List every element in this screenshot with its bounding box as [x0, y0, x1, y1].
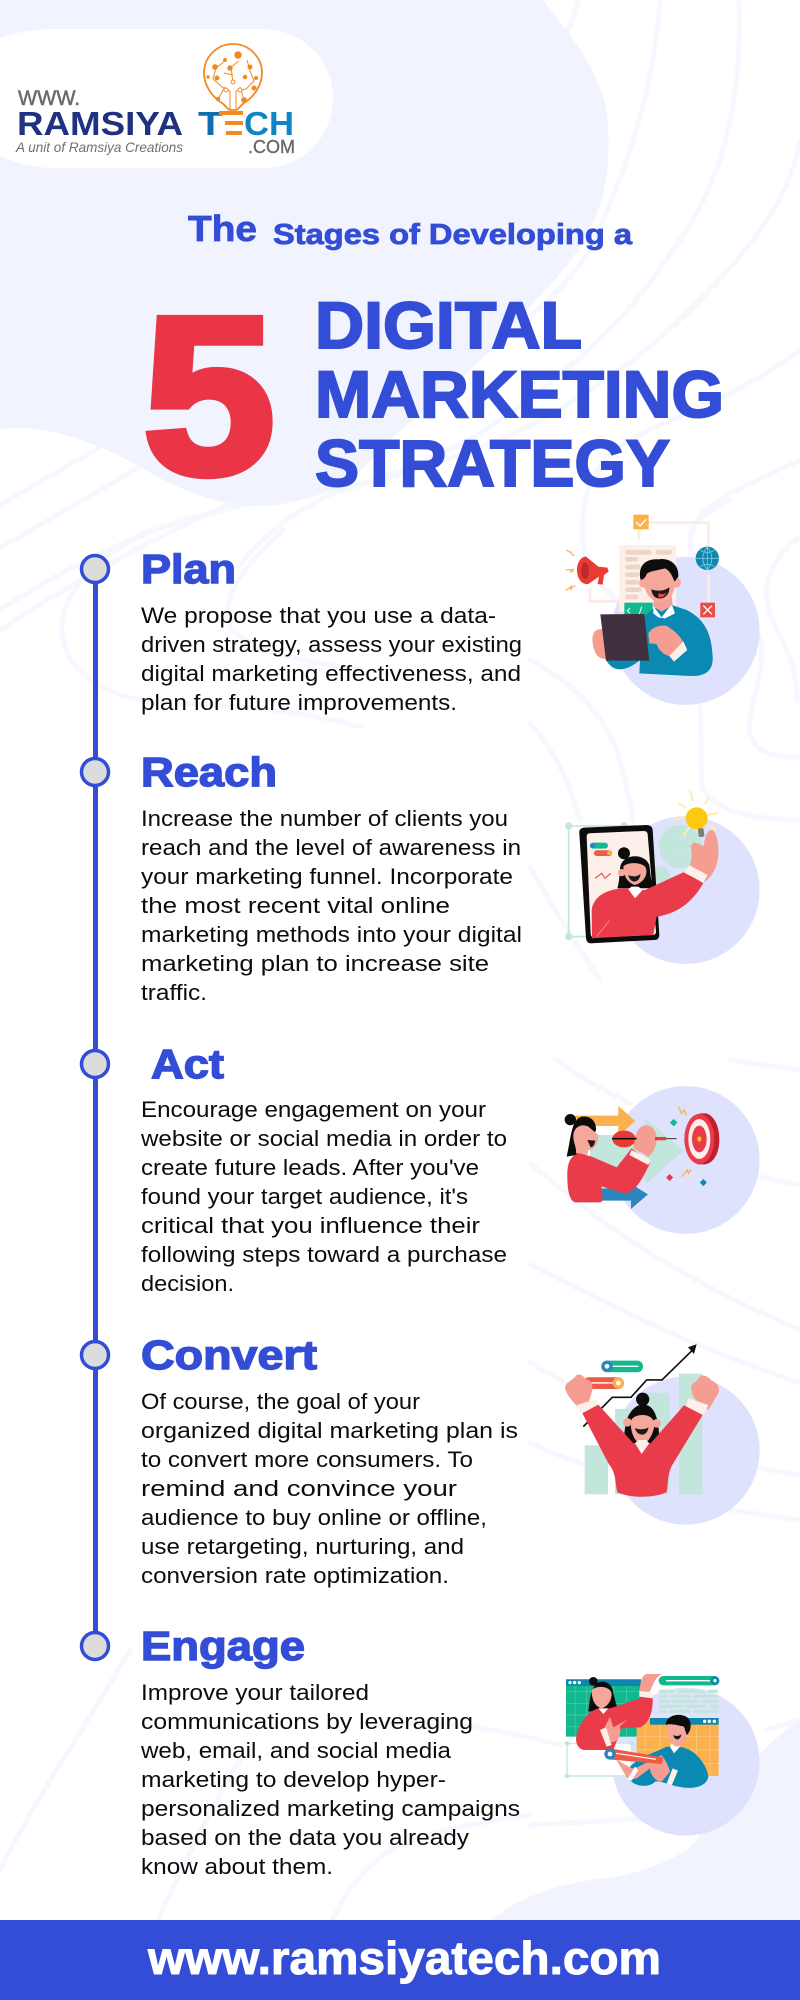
text: convert: to convert more consumers. To: [141, 1447, 473, 1472]
text: plan: driven strategy, assess your existing: [141, 632, 522, 657]
text: reach: reach and the level of awareness in: [141, 835, 521, 860]
text: reach: marketing methods into your digital: [141, 922, 522, 947]
illustration: convert, celebrating woman with chart: [565, 1344, 760, 1525]
text: reach: the most recent vital online: [141, 893, 450, 918]
heading: act: Act: [151, 1041, 224, 1087]
text: act: website or social media in order to: [140, 1126, 507, 1151]
heading: convert: Convert: [141, 1332, 317, 1378]
timeline line: [93, 569, 98, 1646]
text: reach: traffic.: [141, 980, 207, 1005]
logo tech CH: CH: [244, 105, 294, 142]
section: reach: [141, 749, 522, 1005]
text: engage: communications by leveraging: [141, 1709, 473, 1734]
marker: plan: [82, 556, 108, 582]
text: engage: know about them.: [141, 1854, 333, 1879]
footer url: www.ramsiyatech.com: [147, 1932, 661, 1984]
text: reach: Increase the number of clients you: [141, 806, 508, 831]
text: reach: marketing plan to increase site: [141, 951, 489, 976]
text: convert: organized digital marketing plan is: [141, 1418, 518, 1443]
timeline: [82, 556, 108, 1660]
heading: plan: Plan: [141, 546, 236, 592]
title: Strategy: STRATEGY: [315, 426, 670, 500]
logo dotcom: .COM: [248, 137, 295, 157]
text: convert: conversion rate optimization.: [141, 1563, 449, 1588]
text: convert: Of course, the goal of your: [141, 1389, 421, 1414]
text: engage: Improve your tailored: [141, 1680, 369, 1705]
text: act: found your target audience, it's: [141, 1184, 468, 1209]
text: engage: personalized marketing campaigns: [141, 1796, 520, 1821]
logo text: WWW.: [18, 87, 80, 110]
background blob: top: [0, 0, 608, 506]
logo name: RAMSIYA: [17, 105, 183, 142]
text: convert: remind and convince your: [141, 1476, 458, 1501]
text: convert: use retargeting, nurturing, and: [141, 1534, 464, 1559]
title: Marketing: MARKETING: [315, 357, 724, 431]
title: Digital: DIGITAL: [315, 288, 582, 362]
text: plan: We propose that you use a data-: [141, 603, 496, 628]
section: convert: [141, 1332, 518, 1588]
text: act: decision.: [141, 1271, 234, 1296]
illustration: engage, two people with screens: [565, 1674, 760, 1836]
illustration: plan, man with tablet: [566, 515, 760, 705]
illustration: act, woman aiming dart at target: [565, 1086, 760, 1234]
text: engage: web, email, and social media: [140, 1738, 452, 1763]
text: reach: your marketing funnel. Incorporate: [141, 864, 513, 889]
text: act: critical that you influence their: [141, 1213, 481, 1238]
title: [143, 208, 724, 521]
logo tech E bars: [219, 111, 243, 135]
marker: convert: [82, 1342, 108, 1368]
text: act: create future leads. After you've: [141, 1155, 479, 1180]
text: engage: [140, 1680, 520, 1879]
logo tagline: A unit of Ramsiya Creations: [15, 139, 183, 155]
text: reach: [141, 806, 522, 1005]
text: engage: based on the data you already: [141, 1825, 470, 1850]
heading: engage: Engage: [141, 1623, 305, 1669]
text: plan: [141, 603, 522, 715]
marker: reach: [82, 758, 108, 786]
big number 5: 5: [143, 271, 275, 521]
heading: reach: Reach: [141, 749, 277, 795]
text: engage: marketing to develop hyper-: [141, 1767, 446, 1792]
logo pill: [0, 29, 333, 168]
footer bar: [0, 1920, 800, 2000]
background blob: bottom: [492, 1720, 800, 1920]
text: act: [140, 1097, 507, 1296]
logo badge: [0, 29, 333, 168]
text: act: following steps toward a purchase: [141, 1242, 507, 1267]
title: The: The: [188, 208, 257, 249]
title: Stages of Developing a: Stages of Developing a: [273, 219, 633, 251]
text: plan: digital marketing effectiveness, and: [141, 661, 521, 686]
illustration: reach, woman in phone with bulb: [565, 791, 760, 964]
text: act: Encourage engagement on your: [141, 1097, 487, 1122]
marker: engage: [82, 1632, 108, 1660]
logo bulb icon: [204, 44, 262, 110]
marker: act: [82, 1050, 108, 1078]
text: convert: audience to buy online or offline,: [141, 1505, 487, 1530]
text: convert: [141, 1389, 518, 1588]
section: act: [140, 1041, 507, 1296]
section: plan: [141, 546, 522, 715]
logo tech T: T: [198, 105, 223, 142]
section: engage: [140, 1623, 520, 1879]
text: plan: plan for future improvements.: [141, 690, 457, 715]
